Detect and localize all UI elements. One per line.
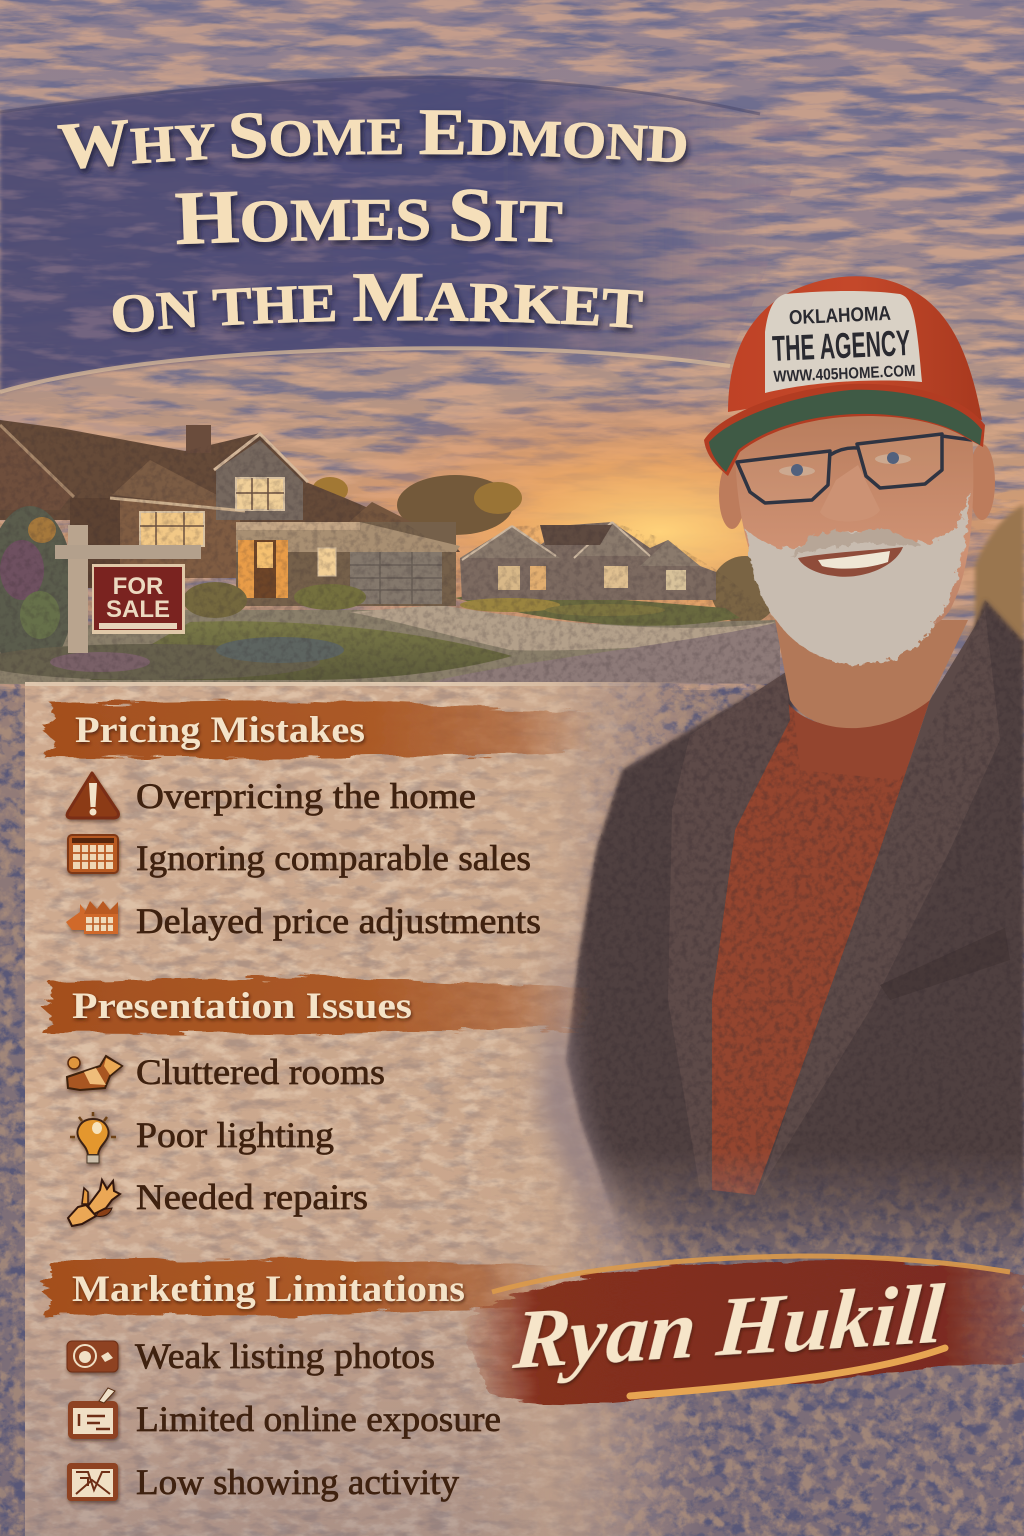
marketing item: limited online exposure: Limited online exposure <box>136 1399 501 1439</box>
marketing item: limited online exposure <box>68 1388 501 1439</box>
presentation item: needed repairs: Needed repairs <box>136 1177 368 1217</box>
title: HOMES SIT <box>175 189 568 252</box>
title backdrop: dark blue brush swoosh <box>0 70 810 400</box>
cap patch: THE AGENCY <box>771 322 911 369</box>
icon: camera <box>67 1341 118 1372</box>
cap patch: WWW.405HOME.COM <box>773 363 916 386</box>
hillside behind portrait <box>975 505 1024 660</box>
section banner: presentation issues <box>40 977 590 1034</box>
trees behind houses <box>312 475 779 624</box>
section banner: marketing limitations: Marketing Limitations <box>72 1269 465 1310</box>
painterly grain over scene <box>0 415 780 683</box>
panel: parchment content area <box>25 682 705 1536</box>
title <box>57 110 692 339</box>
portrait: Ryan Hukill <box>540 276 1024 1290</box>
moustache and mouth <box>790 530 922 577</box>
eyes <box>779 452 911 476</box>
lawn and driveway <box>0 590 780 684</box>
marketing item: low showing activity: Low showing activity <box>136 1462 459 1502</box>
pricing item: overpricing the home <box>67 773 476 818</box>
section banner: pricing mistakes <box>42 700 595 758</box>
title: ON THE MARKET <box>112 274 649 339</box>
presentation item: cluttered rooms: Cluttered rooms <box>136 1052 385 1092</box>
illustration: suburban street at sunset <box>0 415 780 684</box>
nose <box>820 465 880 522</box>
cap <box>704 276 985 476</box>
for sale sign: SALE <box>106 596 170 623</box>
beard <box>746 490 970 665</box>
neighbouring houses <box>460 522 716 600</box>
icon: calendar grid <box>68 835 118 873</box>
glasses <box>737 434 972 503</box>
icon: listing card <box>68 1388 118 1439</box>
for sale sign <box>55 525 201 653</box>
face <box>735 408 973 646</box>
icon: framed chart <box>67 1463 118 1501</box>
icon: light bulb <box>70 1112 116 1163</box>
presentation item: poor lighting: Poor lighting <box>136 1115 334 1155</box>
ears <box>719 444 995 529</box>
jacket and shirt <box>540 600 1024 1290</box>
title: WHY SOME EDMOND <box>57 110 692 176</box>
icon: warning triangle <box>67 773 118 818</box>
section banner: presentation issues: Presentation Issues <box>72 986 412 1027</box>
pricing item: delayed price adjustments: Delayed price adjustments <box>136 901 541 941</box>
cap patch <box>765 291 922 393</box>
presentation item: poor lighting <box>70 1112 334 1163</box>
main house <box>0 420 460 606</box>
shrubs and flowers <box>0 506 665 680</box>
marketing item: weak listing photos: Weak listing photos <box>135 1336 435 1376</box>
icon: work gloves <box>68 1180 120 1226</box>
presentation item: needed repairs <box>68 1177 368 1226</box>
section banner: pricing mistakes: Pricing Mistakes <box>75 710 365 751</box>
name banner: brush ribbon with signature: Ryan Hukill <box>509 1268 948 1387</box>
neck <box>775 620 968 728</box>
cap patch: OKLAHOMA <box>789 303 891 329</box>
icon: cleaning brush <box>67 1056 122 1090</box>
name banner: brush ribbon with signature <box>460 1256 1024 1404</box>
section banner: marketing limitations <box>40 1258 560 1316</box>
for sale sign: FOR <box>113 573 163 600</box>
icon: price tag building <box>66 901 118 934</box>
pricing item: overpricing the home: Overpricing the home <box>136 776 476 816</box>
pricing item: ignoring comparable sales: Ignoring comparable sales <box>136 838 531 878</box>
